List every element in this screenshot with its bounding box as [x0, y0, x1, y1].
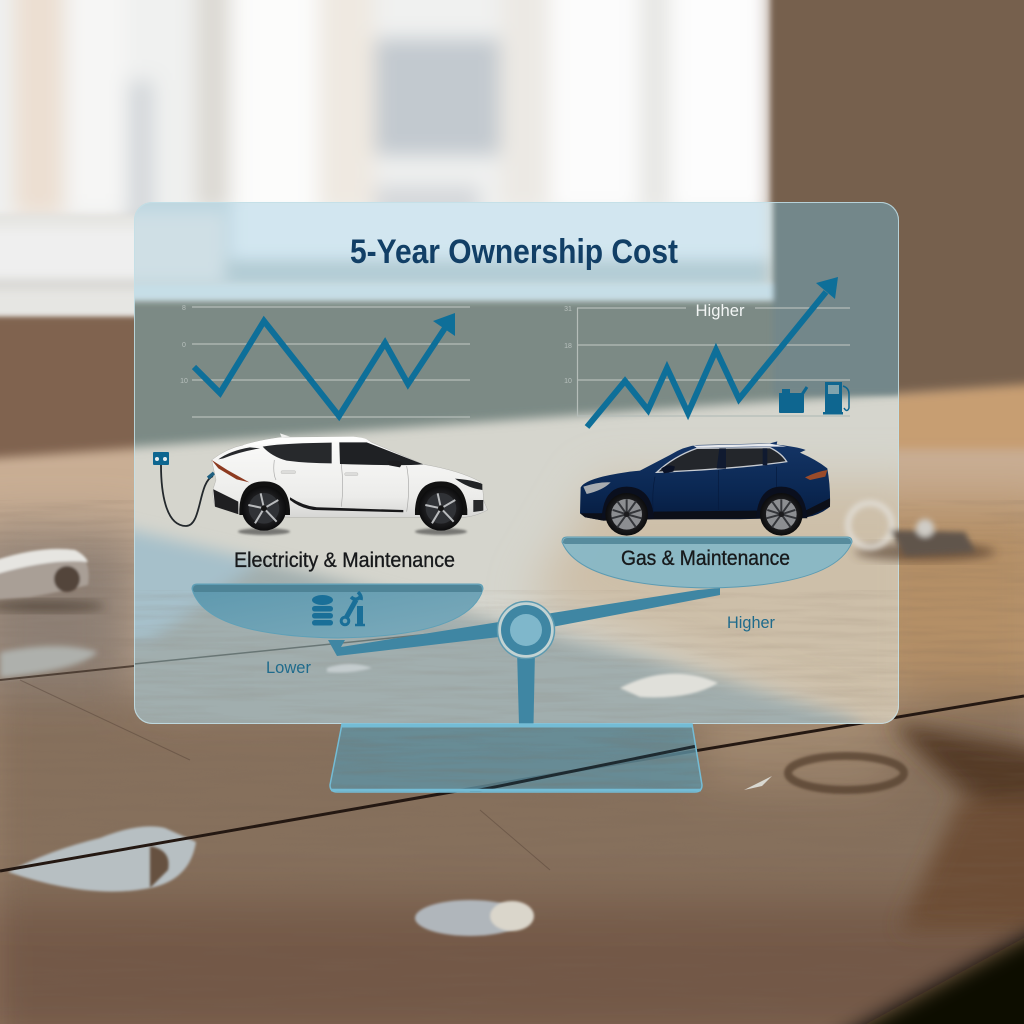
left pan [192, 584, 483, 638]
scale stand [517, 650, 535, 725]
label: gas and maintenance: Gas & Maintenance [621, 546, 790, 570]
axis labels: electric chart [180, 305, 188, 385]
background: blurred keys [848, 503, 995, 561]
axis labels: electric chart: 0 [182, 342, 186, 349]
axis labels: electric chart: 10 [180, 378, 188, 385]
axis labels: gas chart: 18 [564, 343, 572, 350]
label: electricity and maintenance: Electricity & Maintenance [234, 548, 455, 572]
icon: fuel can [779, 387, 807, 413]
line chart: electricity cost [180, 305, 470, 417]
axis labels: gas chart: 31 [564, 306, 572, 313]
background: dark table corner [800, 918, 1024, 1024]
arrowhead: electric [433, 313, 455, 336]
arrowhead: gas [816, 277, 838, 299]
scale pivot [498, 602, 554, 658]
icon: coins [312, 595, 333, 626]
background: small blurred silver car [0, 549, 105, 612]
balance scale [192, 537, 852, 725]
title: 5-Year Ownership Cost [350, 233, 678, 271]
axis labels: gas chart [564, 306, 572, 385]
scale beam [328, 588, 720, 656]
label: lower cost: Lower [266, 658, 311, 677]
trend line: electric [194, 321, 445, 416]
white electric car [212, 433, 488, 535]
icon: charger with cable [153, 452, 214, 526]
glass base [330, 724, 702, 792]
icon: gas pump [823, 382, 849, 414]
trend line: gas [587, 292, 826, 427]
line chart: gas cost [564, 277, 850, 427]
glass panel [134, 202, 899, 724]
label: higher cost: Higher [727, 613, 775, 632]
background: water puddles and stains [0, 636, 1024, 936]
axis labels: gas chart: 10 [564, 378, 572, 385]
label: higher on chart: Higher [696, 301, 745, 320]
icon: wrench and tool [341, 592, 365, 625]
right pan [562, 537, 852, 588]
background: wooden table [0, 382, 1024, 1024]
blue gas car [580, 441, 830, 536]
axis labels: electric chart: 8 [182, 305, 186, 312]
